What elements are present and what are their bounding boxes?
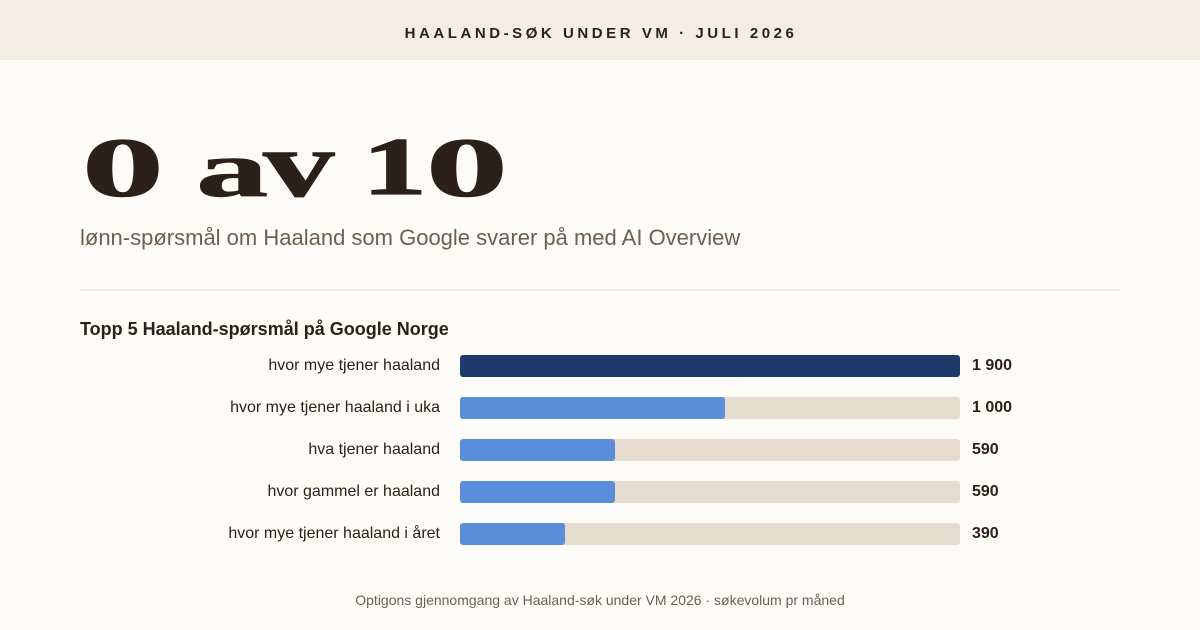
bar row: hva tjener haaland: hva tjener haaland [308, 441, 440, 458]
bar chart [228, 355, 1012, 545]
bar row: hvor gammel er haaland: 590 [972, 483, 999, 500]
bar row: hvor mye tjener haaland: hvor mye tjener haaland [268, 357, 440, 374]
bar row: hvor mye tjener haaland i året: hvor mye tjener haaland i året [228, 525, 440, 542]
headline: 0 av 10: 0 [82, 121, 164, 215]
bar row: hvor mye tjener haaland: 1 900 [972, 357, 1012, 374]
bar row: hvor mye tjener haaland i uka: hvor mye tjener haaland i uka [230, 399, 440, 416]
footer source note: Optigons gjennomgang av Haaland-søk under VM 2026 · søkevolum pr måned [355, 592, 845, 608]
bar row: hva tjener haaland: 590 [972, 441, 999, 458]
headline: 0 av 10: a [196, 126, 268, 214]
bar row: hvor mye tjener haaland i året: 390 [972, 525, 999, 542]
header band [0, 0, 1200, 60]
chart heading: Topp 5 Haaland-spørsmål på Google Norge [80, 319, 449, 339]
bar row: hvor gammel er haaland: hvor gammel er haaland [267, 483, 440, 500]
bar row: hvor mye tjener haaland [268, 355, 1012, 377]
headline: 0 av 10: 0 [426, 121, 508, 215]
bar row: hva tjener haaland [308, 439, 999, 461]
bar row: hvor mye tjener haaland i uka [230, 397, 1012, 419]
subtitle: lønn-spørsmål om Haaland som Google svarer på med AI Overview [80, 225, 740, 250]
headline: 0 av 10 [82, 113, 508, 217]
headline: 0 av 10: 1 [362, 121, 427, 212]
bar row: hvor mye tjener haaland i uka: 1 000 [972, 399, 1012, 416]
header title: HAALAND-SØK UNDER VM · JULI 2026 [405, 25, 797, 42]
bar row: hvor gammel er haaland [267, 481, 999, 503]
headline: 0 av 10: v [263, 113, 335, 217]
bar row: hvor mye tjener haaland i året [228, 523, 999, 545]
